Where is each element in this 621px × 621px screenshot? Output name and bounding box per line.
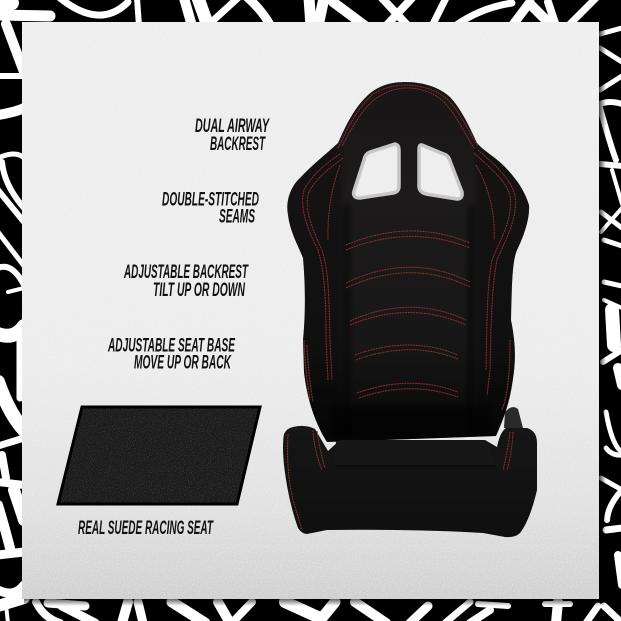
suede swatch bbox=[58, 407, 260, 504]
backrest shading: bolsters and creases bbox=[285, 150, 535, 440]
label: adjustable seat base: ADJUSTABLE SEAT BASE bbox=[107, 336, 236, 356]
cushion crease bbox=[335, 465, 496, 467]
left headrest window bbox=[354, 144, 399, 198]
seat backrest bbox=[287, 82, 529, 442]
label: real suede racing seat: REAL SUEDE RACING SEAT bbox=[78, 518, 214, 539]
label: adjustable backrest: TILT UP OR DOWN bbox=[153, 280, 246, 301]
label: dual airway backrest bbox=[195, 116, 270, 155]
label: dual airway backrest: BACKREST bbox=[210, 134, 266, 155]
seat base bbox=[283, 426, 537, 537]
label: adjustable backrest: ADJUSTABLE BACKREST bbox=[123, 262, 249, 283]
label: adjustable seat base: MOVE UP OR BACK bbox=[134, 352, 232, 374]
label: adjustable backrest bbox=[123, 262, 249, 301]
red double stitching bbox=[288, 85, 515, 530]
right headrest window bbox=[419, 145, 462, 199]
label: double-stitched seams bbox=[162, 190, 259, 228]
racing seat photo bbox=[283, 82, 537, 537]
label: double-stitched seams: SEAMS bbox=[219, 206, 255, 228]
label: adjustable seat base bbox=[107, 336, 236, 374]
label: double-stitched seams: DOUBLE-STITCHED bbox=[162, 190, 259, 210]
bracket bbox=[504, 407, 523, 428]
label: dual airway backrest: DUAL AIRWAY bbox=[195, 116, 270, 137]
